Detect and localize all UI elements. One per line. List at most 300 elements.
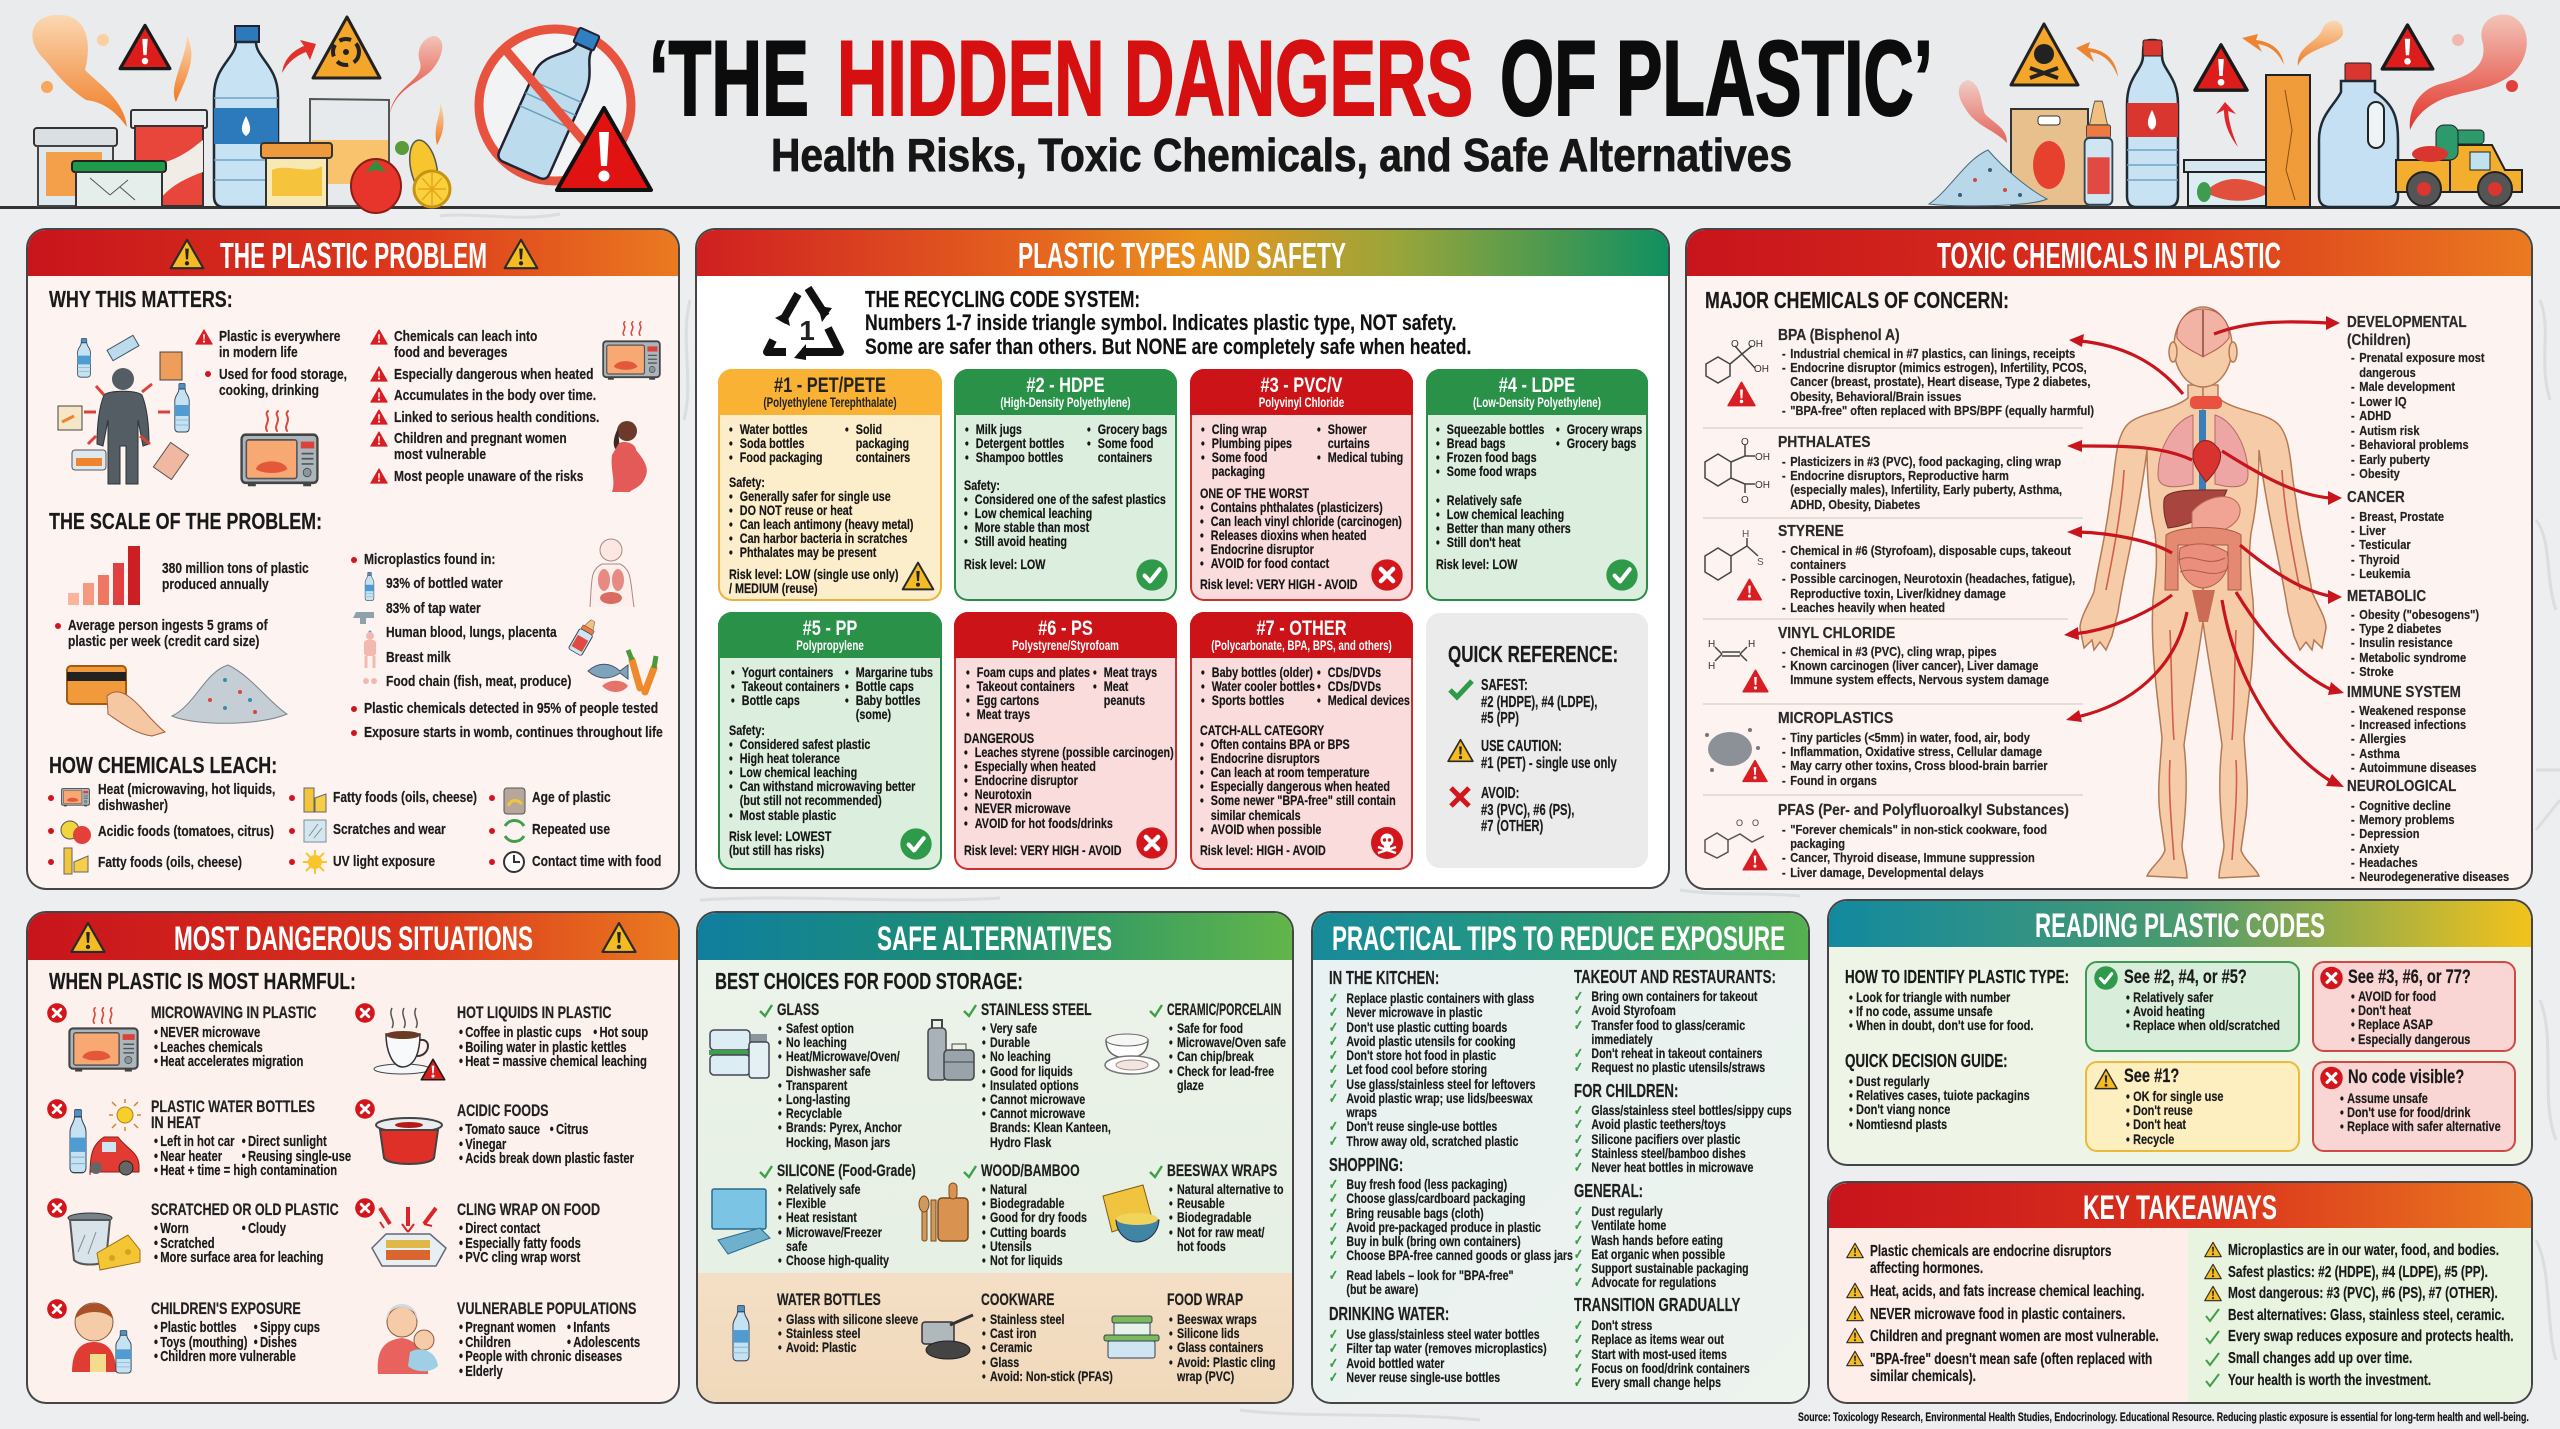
takeaways: facts and actions: Every swap reduces exposure and protects health. xyxy=(2228,1328,2514,1345)
text: safest: #2 (HDPE), #4 (LDPE), xyxy=(1481,694,1597,710)
text: microplastics locations: 83% of tap water xyxy=(386,600,481,616)
tips: drinking water: Never reuse single-use bottles xyxy=(1346,1369,1500,1385)
icon: pile of microplastics xyxy=(172,665,287,723)
effect list: neurological: Neurodegenerative diseases xyxy=(2359,869,2509,884)
text: 380 million tons: 380 million tons of plastic xyxy=(162,560,309,577)
uses second column: • xyxy=(1093,678,1097,694)
safety notes: Generally safer for single use xyxy=(740,488,891,504)
uses xyxy=(729,421,822,466)
tips: in the kitchen: ✓ xyxy=(1329,1076,1338,1092)
text: avoid: #7 (OTHER) xyxy=(1481,818,1543,835)
effect heading: developmental: (Children) xyxy=(2347,332,2411,349)
box list: see 3 6 7: • xyxy=(2351,1016,2355,1032)
heading: drinking water: DRINKING WATER: xyxy=(1329,1304,1449,1324)
panel header: the plastic problem: THE PLASTIC PROBLEM xyxy=(220,235,487,276)
right illustration: plastic products with smoke and warnings xyxy=(1929,14,2527,207)
option list: water bottles: Stainless steel xyxy=(786,1325,860,1341)
uses second column: Shower xyxy=(1328,421,1367,437)
situation: hot liquids: HOT LIQUIDS IN PLASTIC xyxy=(457,1003,611,1022)
option list: food wrap: Silicone lids xyxy=(1177,1325,1240,1341)
safety notes: • xyxy=(1436,520,1440,536)
tips: takeout and restaurants: Transfer food to glass/ceramic xyxy=(1591,1016,1745,1032)
option list: wood: • xyxy=(982,1195,986,1211)
icon: styrene molecule xyxy=(1705,529,1764,600)
text: why it matters, left column: in modern life xyxy=(219,344,298,361)
uses xyxy=(1436,421,1544,480)
option list: stainless steel: Brands: Klean Kanteen, xyxy=(990,1119,1111,1135)
option list: ceramic: • xyxy=(1169,1034,1173,1050)
text: detection facts: Exposure starts in womb, continues throughout life xyxy=(364,724,663,741)
danger notes: Releases dioxins when heated xyxy=(1211,527,1367,543)
situation list: cling wrap: • xyxy=(459,1235,463,1252)
danger notes: • xyxy=(1200,527,1204,543)
uses second column: Medical devices xyxy=(1328,692,1410,708)
tips: for children: ✓ xyxy=(1574,1116,1583,1132)
icon: phthalates molecule xyxy=(1705,437,1770,506)
heading: best choices for food storage: BEST CHOICES FOR FOOD STORAGE: xyxy=(715,968,1023,994)
effect list: developmental: Prenatal exposure most xyxy=(2359,350,2485,365)
icon: bottle in hot car xyxy=(70,1099,141,1175)
uses: Water cooler bottles xyxy=(1212,678,1315,694)
tips: in the kitchen: Let food cool before storing xyxy=(1346,1061,1487,1077)
icon: PFAS molecule: O xyxy=(1736,818,1743,828)
icon: human body with microplastics xyxy=(590,539,634,607)
tips: takeout and restaurants: Request no plastic utensils/straws xyxy=(1591,1059,1765,1075)
uses second column xyxy=(1087,421,1167,465)
safety notes: • xyxy=(964,491,968,507)
tips: transition gradually: ✓ xyxy=(1574,1331,1583,1347)
tips: shopping: Avoid pre-packaged produce in plastic xyxy=(1346,1219,1541,1235)
effect list: cancer: - xyxy=(2351,566,2355,581)
uses: • xyxy=(966,692,970,708)
option list: cookware: • xyxy=(982,1368,986,1384)
panel: practical tips to reduce exposure xyxy=(1313,913,1808,1402)
option list: glass: Long-lasting xyxy=(786,1091,850,1107)
icon: prohibited cracked bottle with warning xyxy=(479,18,651,190)
tips: for children: ✓ xyxy=(1574,1159,1583,1175)
tips: general: Eat organic when possible xyxy=(1591,1246,1725,1262)
icon: BPA molecule: OH xyxy=(1748,339,1763,350)
text: leach heat xyxy=(98,781,275,814)
safety notes: Safety: xyxy=(729,722,765,738)
safety notes: • xyxy=(729,502,733,518)
uses: Meat trays xyxy=(977,706,1030,722)
panel header: plastic types and safety: PLASTIC TYPES AND SAFETY xyxy=(1018,235,1346,276)
heading: how to identify plastic type: HOW TO IDENTIFY PLASTIC TYPE: xyxy=(1845,967,2069,987)
effect list: neurological: Anxiety xyxy=(2359,841,2399,856)
option list: beeswax: • xyxy=(1169,1195,1173,1211)
chemical: styrene details: - xyxy=(1782,600,1786,615)
uses: Egg cartons xyxy=(977,692,1039,708)
option list: glass: • xyxy=(778,1077,782,1093)
uses: Bread bags xyxy=(1447,435,1505,451)
chemical: PFAS details: - xyxy=(1782,822,1786,837)
option list: stainless steel: • xyxy=(982,1105,986,1121)
danger notes xyxy=(1200,723,1396,836)
box list: no code: Don't use for food/drink xyxy=(2347,1104,2470,1120)
arrows: body to health effects xyxy=(2214,322,2332,782)
safety notes: • xyxy=(729,778,733,794)
tips: shopping: ✓ xyxy=(1329,1190,1338,1206)
safety notes: • xyxy=(964,533,968,549)
text: detection facts xyxy=(364,700,663,741)
uses second column: • xyxy=(1317,421,1321,437)
option list: silicone: safe xyxy=(786,1238,807,1254)
tips: in the kitchen: ✓ xyxy=(1329,1118,1338,1134)
chemical: BPA details xyxy=(1782,347,2094,418)
option list: glass: Safest option xyxy=(786,1020,854,1036)
safety notes: Can harbor bacteria in scratches xyxy=(740,530,908,546)
subtitle: Health Risks, Toxic Chemicals, and Safe Alternatives xyxy=(771,129,1792,181)
uses second column: Margarine tubs xyxy=(856,664,933,680)
takeaways icons xyxy=(1829,1183,2531,1402)
uses second column: Meat trays xyxy=(1104,664,1157,680)
safety notes: Can leach antimony (heavy metal) xyxy=(740,516,914,532)
effect list: neurological: - xyxy=(2351,869,2355,884)
heading: shopping: SHOPPING: xyxy=(1329,1155,1403,1175)
safety notes: • xyxy=(1436,492,1440,508)
tips: shopping: ✓ xyxy=(1329,1233,1338,1249)
card title: (Low-Density Polyethylene) xyxy=(1473,394,1601,410)
panel: toxic chemicals in plastic xyxy=(1687,230,2531,888)
safety notes: Better than many others xyxy=(1447,520,1571,536)
tips: shopping: ✓ xyxy=(1329,1247,1338,1263)
uses second column: packaging xyxy=(856,435,909,451)
tips: general: Advocate for regulations xyxy=(1591,1274,1716,1290)
tips: for children: Avoid plastic teethers/toys xyxy=(1591,1116,1726,1132)
situation list: vulnerable populations: Infants xyxy=(573,1319,610,1336)
situation list: hot liquids xyxy=(459,1026,648,1070)
list: quick decision guide: Nomtiesnd plasts xyxy=(1856,1116,1947,1132)
option list: stainless steel: • xyxy=(982,1048,986,1064)
option list: food wrap: • xyxy=(1169,1354,1173,1370)
card: #2 HDPE xyxy=(954,369,1177,601)
chemical: microplastics details: - xyxy=(1782,744,1786,759)
uses second column: • xyxy=(1317,449,1321,465)
situation list: water bottles in heat: Reusing single-use xyxy=(248,1148,351,1165)
option list: wood: • xyxy=(982,1252,986,1268)
uses second column: Grocery bags xyxy=(1567,435,1636,451)
option list: ceramic: Can chip/break xyxy=(1177,1048,1254,1064)
option list: beeswax: • xyxy=(1169,1224,1173,1240)
card: #3 PVC/V xyxy=(1190,369,1413,601)
panel: key takeaways xyxy=(1829,1183,2531,1402)
text: why it matters, right column: Especially dangerous when heated xyxy=(394,366,593,383)
safety notes: (but still not recommended) xyxy=(740,792,882,808)
uses second column xyxy=(1317,421,1403,466)
icon set: microplastics sources xyxy=(353,572,377,684)
danger notes: • xyxy=(1200,778,1204,794)
box list: see 2 4 5: • xyxy=(2126,1003,2130,1019)
uses: Shampoo bottles xyxy=(976,449,1063,465)
tips: drinking water xyxy=(1329,1327,1547,1384)
text: leach column 3: Age of plastic xyxy=(532,789,611,806)
text: leach column 2: Scratches and wear xyxy=(333,821,446,838)
effect list: developmental: Autism risk xyxy=(2359,422,2419,438)
heading: for children: FOR CHILDREN: xyxy=(1574,1081,1678,1101)
list: how to identify: Look for triangle with number xyxy=(1856,989,2010,1005)
situation: vulnerable populations: VULNERABLE POPULATIONS xyxy=(457,1299,636,1318)
heading: in the kitchen: IN THE KITCHEN: xyxy=(1329,968,1439,988)
option: stainless steel: STAINLESS STEEL xyxy=(981,1000,1092,1019)
tips: takeout and restaurants: ✓ xyxy=(1574,1002,1583,1018)
uses: Squeezable bottles xyxy=(1447,421,1544,437)
situation list: children's exposure: Toys (mouthing) xyxy=(160,1334,247,1351)
card title: Polypropylene xyxy=(796,637,864,653)
option list: silicone: • xyxy=(778,1224,782,1240)
text: 380 million tons: produced annually xyxy=(162,576,269,593)
option list: wood: Cutting boards xyxy=(990,1224,1066,1240)
panel: the plastic problem xyxy=(28,230,678,888)
icon: microwave xyxy=(69,1008,138,1072)
list: how to identify: • xyxy=(1849,1017,1853,1033)
box list: see 1: • xyxy=(2126,1116,2130,1132)
icon: lidded containers xyxy=(1104,1316,1159,1358)
text: leach column 2 xyxy=(333,789,477,870)
uses: • xyxy=(1436,421,1440,437)
icon: recycling triangle number 1 xyxy=(763,286,844,360)
safety notes: Still don't heat xyxy=(1447,534,1521,550)
safety notes: Low chemical leaching xyxy=(975,505,1092,521)
text: avoid: #3 (PVC), #6 (PS), xyxy=(1481,802,1574,818)
tips: in the kitchen: Don't reuse single-use bottles xyxy=(1346,1118,1497,1134)
tips: drinking water: ✓ xyxy=(1329,1340,1338,1356)
text: avoid: AVOID: xyxy=(1481,785,1519,802)
option list: silicone: Heat resistant xyxy=(786,1209,857,1225)
tips: for children: ✓ xyxy=(1574,1102,1583,1118)
situation list: vulnerable populations: Pregnant women xyxy=(465,1319,556,1336)
option list: glass: Brands: Pyrex, Anchor xyxy=(786,1119,902,1135)
situation list: water bottles in heat: • xyxy=(242,1148,246,1165)
page header band xyxy=(0,14,2560,214)
tips: general: Support sustainable packaging xyxy=(1591,1260,1749,1276)
panel illustrations xyxy=(698,913,1292,1402)
uses: Soda bottles xyxy=(740,435,804,451)
takeaways: warnings: similar chemicals). xyxy=(1870,1368,1976,1384)
chemical: BPA details: Obesity, Behavioral/Brain issues xyxy=(1790,389,1961,404)
chemical: microplastics details: Inflammation, Oxidative stress, Cellular damage xyxy=(1790,744,2042,759)
option list: ceramic: Microwave/Oven safe xyxy=(1177,1034,1286,1050)
danger notes: Especially dangerous when heated xyxy=(1211,778,1390,794)
text: leach column 2: UV light exposure xyxy=(333,853,435,870)
list: quick decision guide: • xyxy=(1849,1087,1853,1103)
option list: wood: • xyxy=(982,1238,986,1254)
text: why it matters, right column: Children and pregnant women xyxy=(394,430,567,447)
icon: safe check xyxy=(1136,559,1168,591)
tips: takeout and restaurants: Avoid Styrofoam xyxy=(1591,1002,1676,1018)
uses second column: • xyxy=(1317,692,1321,708)
uses second column: • xyxy=(1556,421,1560,437)
icon: cling wrap over food container xyxy=(372,1207,446,1266)
danger notes: • xyxy=(1200,792,1204,808)
uses second column: • xyxy=(1093,664,1097,680)
uses second column xyxy=(1556,421,1642,452)
box list: no code: Replace with safer alternative xyxy=(2347,1118,2501,1134)
tips: in the kitchen: Never microwave in plastic xyxy=(1346,1004,1482,1020)
icon: credit card and hand xyxy=(67,666,165,736)
text: use caution: #1 (PET) - single use only xyxy=(1481,754,1617,772)
option list: silicone: Relatively safe xyxy=(786,1181,860,1197)
text: leach column 1: Fatty foods (oils, cheese) xyxy=(98,854,242,871)
tips: for children: ✓ xyxy=(1574,1145,1583,1161)
uses xyxy=(1201,665,1315,707)
option list: glass: • xyxy=(778,1119,782,1135)
situation list: hot liquids: Hot soup xyxy=(599,1024,648,1041)
situation: children's exposure: CHILDREN'S EXPOSURE xyxy=(151,1299,301,1318)
effect list: immune system: Allergies xyxy=(2359,731,2406,746)
box list: see 1: • xyxy=(2126,1131,2130,1147)
situation list: scratched plastic: Cloudy xyxy=(248,1220,286,1237)
tips: for children: ✓ xyxy=(1574,1130,1583,1146)
danger notes: • xyxy=(964,758,968,774)
panel header: safe alternatives: SAFE ALTERNATIVES xyxy=(877,920,1112,958)
uses: Plumbing pipes xyxy=(1212,435,1292,451)
safety notes: Low chemical leaching xyxy=(740,764,857,780)
safety notes: • xyxy=(729,736,733,752)
uses second column xyxy=(845,421,910,465)
box list: see 3 6 7: • xyxy=(2351,988,2355,1004)
option list: beeswax: hot foods xyxy=(1177,1238,1226,1254)
effect list: metabolic: - xyxy=(2351,650,2355,665)
option list: silicone: Choose high-quality xyxy=(786,1252,889,1268)
chemical: styrene details: Reproductive toxin, Liver/kidney damage xyxy=(1790,586,2006,601)
icon: bowl of acidic food xyxy=(376,1118,442,1164)
tips: in the kitchen: wraps xyxy=(1346,1104,1377,1120)
red bullets xyxy=(48,371,495,865)
option list: beeswax: • xyxy=(1169,1181,1173,1197)
panel header: safe alternatives xyxy=(698,913,1292,960)
effect list: cancer: Liver xyxy=(2359,523,2386,538)
list: how to identify: If no code, assume unsafe xyxy=(1856,1003,1993,1019)
chemical: BPA details: Industrial chemical in #7 plastics, can linings, receipts xyxy=(1790,346,2075,361)
chemical: phthalates details: Plasticizers in #3 (PVC), food packaging, cling wrap xyxy=(1790,454,2061,469)
safety notes: Considered safest plastic xyxy=(740,736,870,752)
heading: major chemicals of concern: MAJOR CHEMICALS OF CONCERN: xyxy=(1705,287,2009,313)
risk level: Risk level: VERY HIGH - AVOID xyxy=(964,842,1122,858)
tips: transition gradually: Start with most-used items xyxy=(1591,1346,1727,1362)
list: quick decision guide: • xyxy=(1849,1073,1853,1089)
situation list: scratched plastic: Worn xyxy=(160,1220,189,1237)
tips: shopping: Buy fresh food (less packaging) xyxy=(1346,1176,1507,1192)
effect list: developmental xyxy=(2351,351,2485,482)
situation list: vulnerable populations: • xyxy=(459,1319,463,1336)
tips: takeout and restaurants: immediately xyxy=(1591,1031,1653,1047)
danger notes: • xyxy=(1200,555,1204,571)
takeaways: warnings: Heat, acids, and fats increase chemical leaching. xyxy=(1870,1283,2144,1300)
effect list: developmental: - xyxy=(2351,437,2355,452)
takeaways: facts and actions xyxy=(2228,1240,2514,1391)
box list: see 2 4 5: Replace when old/scratched xyxy=(2133,1017,2280,1033)
text: recycling code explanation: Some are safer than others. But NONE are completely safe when heated. xyxy=(865,334,1471,359)
tips: in the kitchen: Avoid plastic utensils for cooking xyxy=(1346,1033,1516,1049)
effect list: cancer: Thyroid xyxy=(2359,552,2400,567)
option list: ceramic: glaze xyxy=(1177,1077,1204,1093)
safety notes: High heat tolerance xyxy=(740,750,840,766)
tips: in the kitchen: ✓ xyxy=(1329,990,1338,1006)
tips: in the kitchen: Don't use plastic cutting boards xyxy=(1346,1018,1507,1034)
effect heading: metabolic: METABOLIC xyxy=(2347,588,2426,605)
situation list: vulnerable populations: Children xyxy=(465,1334,511,1351)
card title xyxy=(954,369,1177,415)
panel illustrations xyxy=(48,321,661,874)
danger notes: • xyxy=(1200,499,1204,515)
icon: warning triangles xyxy=(196,330,387,483)
option list: silicone: • xyxy=(778,1252,782,1268)
list: quick decision guide: Dust regularly xyxy=(1856,1073,1930,1089)
panel header: toxic chemicals in plastic: TOXIC CHEMICALS IN PLASTIC xyxy=(1937,235,2281,276)
effect heading: developmental xyxy=(2347,314,2467,350)
chemical: PFAS details: packaging xyxy=(1790,836,1845,851)
effect list: neurological: - xyxy=(2351,855,2355,870)
icon: fish and carrots xyxy=(588,650,656,692)
box list: see 3 6 7: Especially dangerous xyxy=(2358,1031,2470,1047)
illustration: human body with organs xyxy=(2080,307,2326,878)
icon: stainless steel bottle and box xyxy=(928,1020,974,1080)
uses: • xyxy=(731,692,735,708)
safety notes: • xyxy=(1436,506,1440,522)
box heading: see 3 6 7: See #3, #6, or 77? xyxy=(2348,967,2471,988)
chemical: BPA details: "BPA-free" often replaced with BPS/BPF (equally harmful) xyxy=(1790,403,2094,418)
option list: water bottles xyxy=(778,1312,918,1355)
uses: • xyxy=(1201,435,1205,451)
chemical: styrene details: Possible carcinogen, Neurotoxin (headaches, fatigue), xyxy=(1790,571,2075,586)
uses: Takeout containers xyxy=(742,678,840,694)
situation list: scratched plastic: • xyxy=(154,1235,158,1252)
icon: wooden board and utensils xyxy=(919,1183,968,1241)
chemical: phthalates details: - xyxy=(1782,454,1786,469)
takeaways: facts and actions: Best alternatives: Glass, stainless steel, ceramic. xyxy=(2228,1307,2504,1324)
chart: plastic production bars xyxy=(68,546,140,605)
option list: wood: Natural xyxy=(990,1181,1027,1197)
option list: stainless steel: Cannot microwave xyxy=(990,1105,1085,1121)
effect list: neurological: Depression xyxy=(2359,826,2419,841)
option list: stainless steel: Hydro Flask xyxy=(990,1134,1051,1150)
box list: see 3 6 7: AVOID for food xyxy=(2358,988,2436,1004)
icon: water bottle xyxy=(733,1306,749,1361)
situation list: water bottles in heat: Heat + time = high contamination xyxy=(160,1162,337,1179)
option list: glass: • xyxy=(778,1020,782,1036)
tips: shopping: Bring reusable bags (cloth) xyxy=(1346,1204,1484,1220)
situation list: microwaving: Heat accelerates migration xyxy=(160,1053,303,1070)
situation list: children's exposure: • xyxy=(154,1348,158,1365)
tips: takeout and restaurants: ✓ xyxy=(1574,988,1583,1004)
uses: • xyxy=(729,449,733,465)
situation list: microwaving: Leaches chemicals xyxy=(160,1039,263,1056)
icon: vinyl chloride molecule xyxy=(1708,639,1768,692)
option list: glass: • xyxy=(778,1091,782,1107)
situation list: acidic foods: Vinegar xyxy=(465,1136,506,1153)
option list: ceramic: Safe for food xyxy=(1177,1020,1243,1036)
option list: cookware: • xyxy=(982,1311,986,1327)
option list: food wrap: • xyxy=(1169,1311,1173,1327)
situation: scratched plastic: SCRATCHED OR OLD PLASTIC xyxy=(151,1200,339,1219)
icon: ceramic bowl and plate xyxy=(1105,1034,1159,1074)
situation list: acidic foods: Citrus xyxy=(556,1121,588,1138)
box list: no code: Assume unsafe xyxy=(2347,1090,2428,1106)
text: use caution: USE CAUTION: xyxy=(1481,738,1562,755)
tips: drinking water: Avoid bottled water xyxy=(1346,1354,1444,1370)
chemical: vinyl chloride details: Chemical in #3 (PVC), cling wrap, pipes xyxy=(1790,644,1997,659)
icon: glass containers xyxy=(709,1030,769,1078)
option list: glass: • xyxy=(778,1105,782,1121)
option list: glass: • xyxy=(778,1034,782,1050)
chemical: BPA details: - xyxy=(1782,346,1786,361)
tips: for children: Never heat bottles in microwave xyxy=(1591,1159,1753,1175)
box heading: see 2 4 5: See #2, #4, or #5? xyxy=(2124,967,2247,988)
icon: phthalates molecule: OH xyxy=(1755,480,1770,491)
option list: glass: • xyxy=(778,1048,782,1064)
chemical: vinyl chloride details: - xyxy=(1782,644,1786,659)
